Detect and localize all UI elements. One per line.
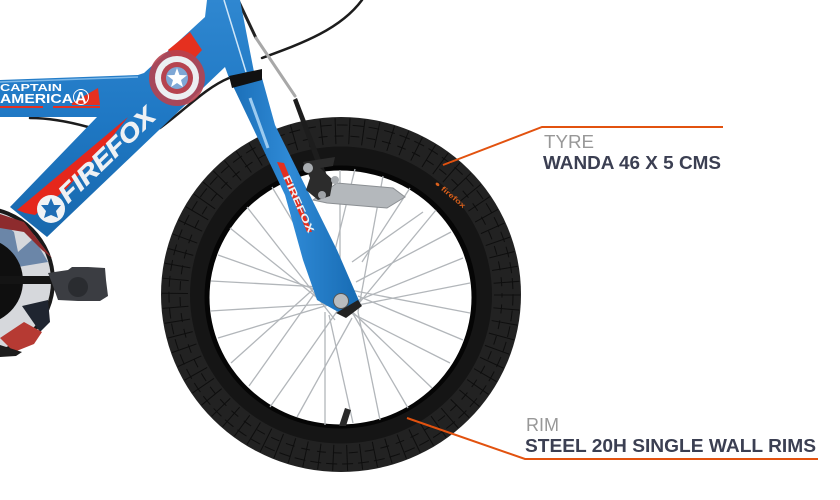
callout: tyre: [443, 127, 723, 173]
fork highlight: [250, 98, 268, 148]
captain america lettering: [0, 83, 74, 106]
fork decal: FIREFOX: [280, 174, 316, 235]
callout: rim: [407, 414, 818, 459]
bicycle frame: [0, 0, 254, 237]
shield logo: [149, 50, 205, 106]
head tube highlight: [224, 0, 246, 72]
pedal: [48, 267, 108, 301]
avengers mark: A: [75, 90, 87, 107]
axle nut: [334, 294, 348, 308]
front wheel: [161, 117, 521, 472]
reflector: [313, 183, 405, 208]
front fork: [229, 69, 362, 318]
firefox star badge: [37, 195, 65, 223]
captain america lettering: AMERICA: [0, 91, 74, 106]
top tube highlight: [0, 77, 138, 82]
tyre: [161, 117, 521, 472]
firefox lettering: FIREFOX: [53, 101, 162, 208]
axle washer: [336, 300, 362, 318]
tyre value: WANDA 46 X 5 CMS: [543, 152, 721, 173]
fork blade: [232, 78, 360, 313]
tyre brand mark: ● firefox: [433, 180, 466, 210]
rim leader line: [407, 418, 818, 459]
rim: [204, 166, 476, 428]
rim value: STEEL 20H SINGLE WALL RIMS: [525, 435, 816, 456]
spokes: [210, 169, 470, 425]
frame tubes: [0, 0, 254, 237]
rim label: RIM: [526, 414, 559, 435]
tyre label: TYRE: [544, 131, 594, 152]
red graphic: down tube: [17, 117, 128, 215]
tyre leader line: [443, 127, 723, 165]
headset collar: [229, 69, 262, 88]
brake and shifter cables: [30, 0, 362, 128]
crank arm: [0, 276, 52, 284]
fork decal: [277, 162, 316, 235]
captain america lettering: CAPTAIN: [0, 83, 62, 94]
red graphic: top tube: [0, 88, 100, 108]
red graphic: top: [168, 32, 202, 72]
valve stem: [339, 408, 351, 426]
chainguard: [0, 206, 55, 357]
brake caliper: [293, 98, 339, 200]
